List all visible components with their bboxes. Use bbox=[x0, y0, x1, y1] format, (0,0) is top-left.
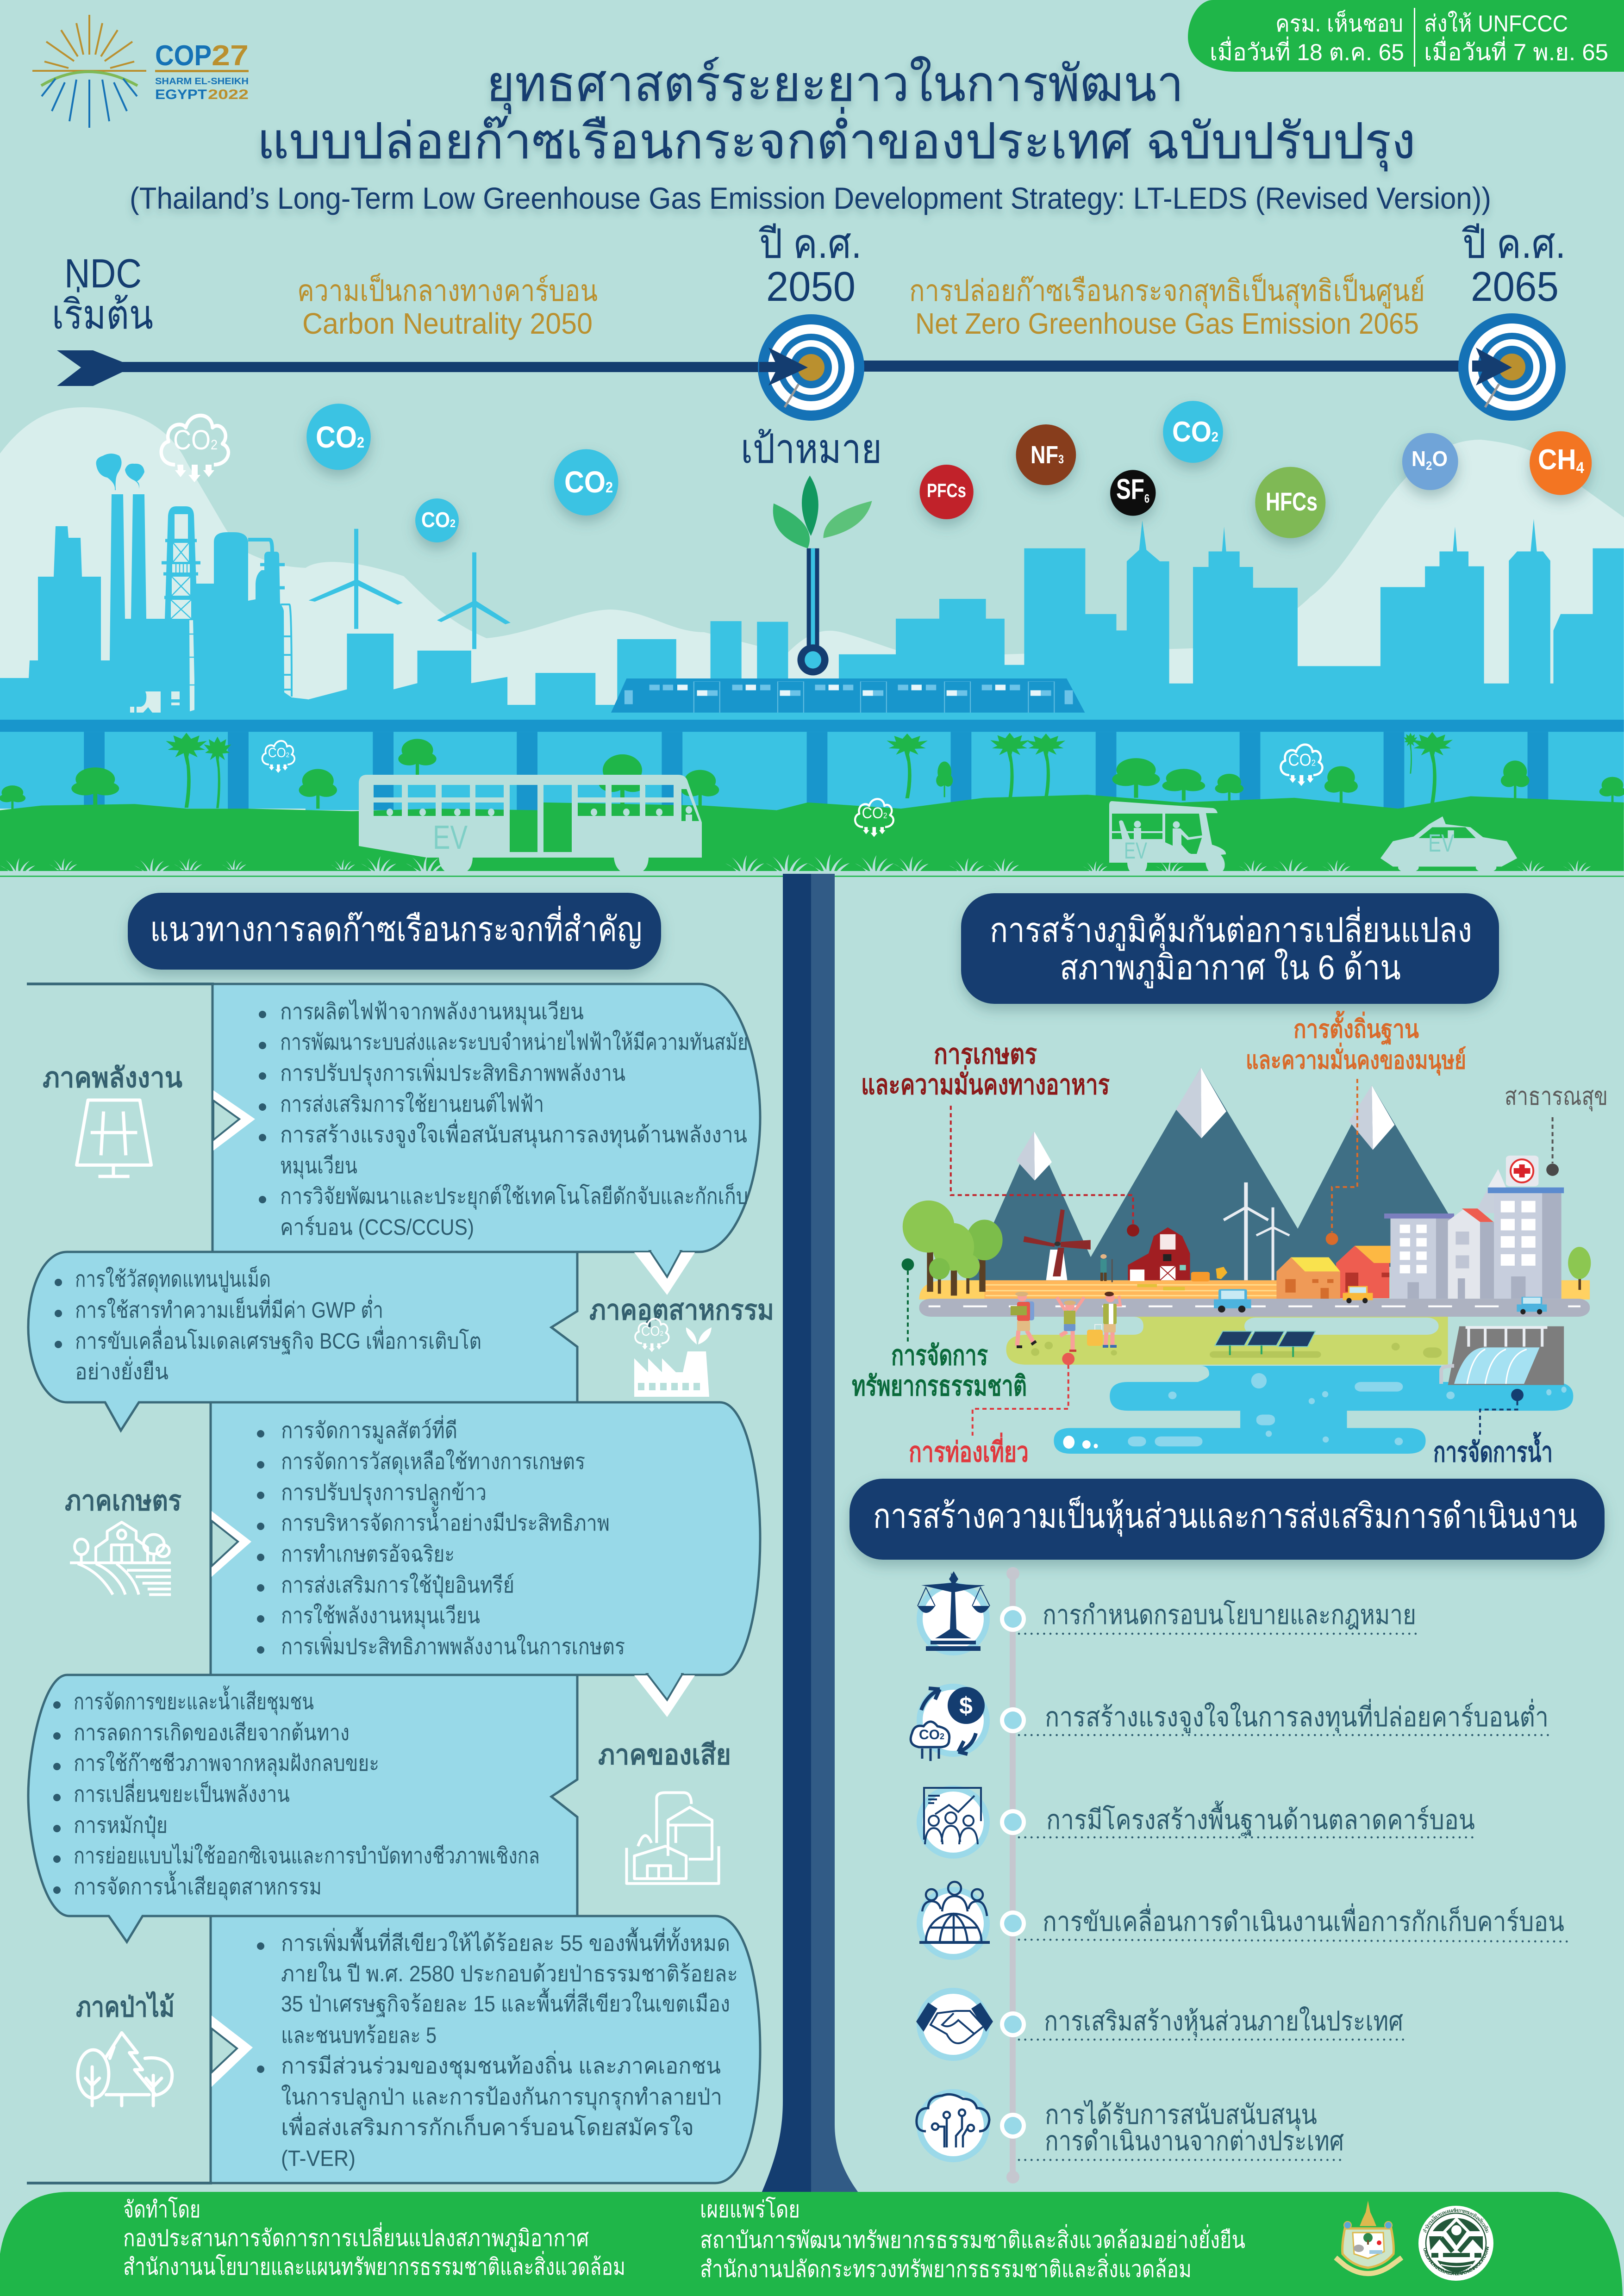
EV tuk tuk: EV bbox=[1124, 838, 1147, 864]
logo: ONEP: สำนักงานนโยบายและแผนทรัพยากรธรรมชาติและสิ่งแวดล้อม bbox=[1422, 2208, 1490, 2234]
panel: industry: อย่างยั่งยืน bbox=[75, 1356, 169, 1384]
heading: mitigation: แนวทางการลดก๊าซเรือนกระจกที่สำคัญ bbox=[150, 905, 642, 949]
gas labels: HFCs bbox=[1266, 487, 1318, 516]
panel: energy: การผลิตไฟฟ้าจากพลังงานหมุนเวียน bbox=[280, 999, 584, 1025]
carbon neutrality label: Carbon Neutrality 2050 bbox=[302, 307, 593, 340]
icon: plant thermometer bbox=[773, 475, 872, 675]
label: agriculture and food security: การเกษตร bbox=[934, 1039, 1037, 1070]
icon: solar panel bbox=[77, 1100, 151, 1176]
icon: factory: CO2 bbox=[641, 1324, 663, 1339]
footer bbox=[0, 2192, 1623, 2296]
title: (Thailand’s Long-Term Low Greenhouse Gas Emission Development Strategy: LT-LEDS (Revised Version)) bbox=[130, 181, 1491, 215]
panel: agriculture: การจัดการวัสดุเหลือใช้ทางการเกษตร bbox=[281, 1449, 585, 1475]
net zero label bbox=[909, 274, 1425, 340]
panel: waste: การลดการเกิดของเสียจากต้นทาง bbox=[74, 1721, 350, 1745]
gas labels: PFCs bbox=[927, 479, 966, 501]
panel: waste: การจัดการน้ำเสียอุตสาหกรรม bbox=[74, 1871, 322, 1900]
panel: forestry: (T-VER) bbox=[281, 2147, 356, 2171]
co2 bubbles bbox=[306, 401, 1592, 542]
COP27 logo: EGYPT bbox=[155, 87, 207, 102]
tourists bbox=[1011, 1292, 1120, 1352]
COP27 logo: SHARM EL-SHEIKH bbox=[155, 76, 249, 87]
panel: energy bbox=[27, 983, 760, 1295]
panel: forestry: ในการปลูกป่า และการป้องกันการบุกรุกทำลายป่า bbox=[281, 2084, 722, 2110]
label: water management: การจัดการน้ำ bbox=[1433, 1431, 1553, 1468]
panel: forestry: และชนบทร้อยละ 5 bbox=[281, 2023, 437, 2048]
gas labels: CO2 bbox=[564, 465, 613, 499]
panel: industry: การใช้วัสดุทดแทนปูนเม็ด bbox=[75, 1266, 271, 1293]
panel: forestry bbox=[27, 1916, 760, 2184]
co2 clouds on landscape: CO2 bbox=[1288, 750, 1316, 769]
city skyline bbox=[306, 519, 1624, 810]
title: แบบปล่อยก๊าซเรือนกระจกต่ำของประเทศ ฉบับปรับปรุง bbox=[257, 107, 1416, 172]
date badge: เมื่อวันที่ 18 ต.ค. 65 bbox=[1210, 37, 1404, 65]
panel: waste: การเปลี่ยนขยะเป็นพลังงาน bbox=[74, 1779, 290, 1807]
COP27 logo: COP bbox=[155, 40, 212, 72]
icon: trees bbox=[78, 2033, 172, 2106]
partnership list text bbox=[1019, 1599, 1569, 2160]
panel: agriculture bbox=[65, 1402, 760, 1717]
grass blades bbox=[0, 854, 1624, 876]
panel: waste bbox=[28, 1675, 731, 1942]
panel: forestry: การมีส่วนร่วมของชุมชนท้องถิ่น และภาคเอกชน bbox=[281, 2050, 721, 2079]
carbon neutrality label: ความเป็นกลางทางคาร์บอน bbox=[297, 274, 598, 307]
EV bus: EV bbox=[433, 819, 468, 856]
partnership list text: การเสริมสร้างหุ้นส่วนภายในประเทศ bbox=[1044, 2006, 1403, 2038]
gas labels: 4 bbox=[1576, 459, 1584, 477]
label: natural resources: ทรัพยากรธรรมชาติ bbox=[852, 1370, 1027, 1401]
item: low-carbon investment: CO2 bbox=[919, 1727, 944, 1742]
footer: สำนักงานปลัดกระทรวงทรัพยากรธรรมชาติและสิ่งแวดล้อม bbox=[700, 2253, 1192, 2282]
timeline arrow shafts bbox=[57, 350, 1481, 386]
panel: waste: ภาคของเสีย bbox=[598, 1739, 731, 1770]
panel: energy: การพัฒนาระบบส่งและระบบจำหน่ายไฟฟ้าให้มีความทันสมัย bbox=[280, 1029, 748, 1055]
panel: energy: หมุนเวียน bbox=[280, 1154, 357, 1179]
COP27 logo bbox=[32, 15, 249, 128]
panel: waste: การจัดการขยะและน้ำเสียชุมชน bbox=[74, 1686, 314, 1715]
item: carbon market bbox=[917, 1786, 990, 1859]
EV car bbox=[1380, 816, 1517, 872]
gas labels: CO2 bbox=[421, 508, 456, 532]
panel: agriculture: ภาคเกษตร bbox=[65, 1485, 181, 1516]
panel: energy: การวิจัยพัฒนาและประยุกต์ใช้เทคโนโลยีดักจับและกักเก็บ bbox=[280, 1183, 748, 1210]
panel: energy: การสร้างแรงจูงใจเพื่อสนับสนุนการลงทุนด้านพลังงาน bbox=[280, 1119, 747, 1148]
elevated track and pillars bbox=[0, 713, 1624, 810]
panel: agriculture: การปรับปรุงการปลูกข้าว bbox=[281, 1481, 487, 1506]
panel: energy: การปรับปรุงการเพิ่มประสิทธิภาพพลังงาน bbox=[280, 1058, 625, 1087]
logo: ministry seal bbox=[1336, 2201, 1402, 2273]
heading: adaptation: สภาพภูมิอากาศ ใน 6 ด้าน bbox=[1060, 948, 1401, 989]
panel: forestry: ภายใน ปี พ.ศ. 2580 ประกอบด้วยป่าธรรมชาติร้อยละ bbox=[281, 1961, 738, 1986]
panel: waste: การหมักปุ๋ย bbox=[74, 1813, 168, 1839]
panel: agriculture: การใช้พลังงานหมุนเวียน bbox=[281, 1603, 480, 1629]
label: agriculture and food security: และความมั่นคงทางอาหาร bbox=[861, 1065, 1110, 1100]
gas labels: CO2 bbox=[1172, 416, 1218, 448]
gas labels: 2 bbox=[1426, 459, 1432, 473]
item: policy and law bbox=[917, 1571, 990, 1655]
partnership list text: การกำหนดกรอบนโยบายและกฎหมาย bbox=[1043, 1599, 1416, 1630]
net zero label: Net Zero Greenhouse Gas Emission 2065 bbox=[915, 307, 1419, 340]
gas labels: SF bbox=[1116, 473, 1153, 505]
co2 clouds on landscape: CO2 bbox=[173, 424, 218, 455]
gas labels: N bbox=[1412, 447, 1427, 471]
date badge: ส่งให้ UNFCCC bbox=[1424, 11, 1568, 37]
item: international support bbox=[917, 2089, 990, 2162]
gas labels: CO2 bbox=[316, 420, 364, 454]
gas labels: CH bbox=[1538, 444, 1580, 476]
heading: adaptation bbox=[961, 893, 1499, 1004]
partnership list text: การขับเคลื่อนการดำเนินงานเพื่อการกักเก็บคาร์บอน bbox=[1043, 1903, 1564, 1937]
panel: forestry: การเพิ่มพื้นที่สีเขียวให้ได้ร้อยละ 55 ของพื้นที่ทั้งหมด bbox=[281, 1927, 730, 1956]
target 2050 bbox=[758, 314, 864, 421]
partnership list text: การได้รับการสนับสนับสนุน bbox=[1045, 2099, 1317, 2131]
partnership timeline line bbox=[1006, 1567, 1019, 2184]
gas labels bbox=[316, 416, 1584, 532]
list markers bbox=[1000, 1606, 1026, 2139]
partnership list text: การดำเนินงานจากต่างประเทศ bbox=[1045, 2126, 1344, 2156]
icon: waste plant bbox=[627, 1792, 719, 1884]
panel: energy: การส่งเสริมการใช้ยานยนต์ไฟฟ้า bbox=[280, 1091, 544, 1117]
panel: forestry: เพื่อส่งเสริมการกักเก็บคาร์บอนโดยสมัครใจ bbox=[281, 2112, 694, 2140]
footer: สถาบันการพัฒนาทรัพยากรธรรมชาติและสิ่งแวดล้อมอย่างยั่งยืน bbox=[700, 2224, 1245, 2253]
panel: agriculture: การเพิ่มประสิทธิภาพพลังงานในการเกษตร bbox=[281, 1631, 625, 1659]
item: domestic partnerships bbox=[916, 1988, 993, 2061]
timeline labels: 2050 bbox=[766, 264, 856, 310]
gas labels: NF3 bbox=[1031, 441, 1064, 469]
EV car: EV bbox=[1428, 829, 1454, 857]
title bbox=[130, 56, 1491, 215]
partnership list text: การมีโครงสร้างพื้นฐานด้านตลาดคาร์บอน bbox=[1046, 1801, 1475, 1836]
item: low-carbon investment: $ bbox=[959, 1692, 973, 1719]
icon: farm bbox=[70, 1522, 171, 1594]
label: human settlement: และความมั่นคงของมนุษย์ bbox=[1246, 1042, 1466, 1076]
title: ยุทธศาสตร์ระยะยาวในการพัฒนา bbox=[487, 56, 1184, 114]
footer: กองประสานการจัดการการเปลี่ยนแปลงสภาพภูมิอากาศ bbox=[123, 2222, 589, 2252]
central column bbox=[760, 874, 861, 2196]
panel: industry: การใช้สารทำความเย็นที่มีค่า GWP ต่ำ bbox=[75, 1294, 383, 1323]
panel: industry bbox=[28, 1252, 774, 1431]
gas labels: O bbox=[1432, 447, 1448, 471]
footer: เผยแพร่โดย bbox=[700, 2196, 800, 2222]
timeline labels: ปี ค.ศ. bbox=[1462, 221, 1566, 267]
co2 clouds on landscape: CO2 bbox=[862, 804, 887, 822]
illustration: climate resilience landscape bbox=[902, 1067, 1591, 1454]
label: human settlement: การตั้งถิ่นฐาน bbox=[1293, 1011, 1419, 1045]
date badge: เมื่อวันที่ 7 พ.ย. 65 bbox=[1424, 37, 1608, 65]
panel: agriculture: การส่งเสริมการใช้ปุ๋ยอินทรีย์ bbox=[281, 1572, 514, 1599]
item: carbon capture bbox=[917, 1882, 990, 1960]
footer: จัดทำโดย bbox=[123, 2196, 200, 2222]
timeline labels bbox=[52, 221, 1566, 472]
date badge bbox=[1188, 0, 1624, 72]
panel: agriculture: การทำเกษตรอัจฉริยะ bbox=[281, 1542, 455, 1567]
label: human settlement bbox=[1246, 1011, 1466, 1076]
panel: waste: การใช้ก๊าซชีวภาพจากหลุมฝังกลบขยะ bbox=[74, 1750, 379, 1777]
ground and trees bbox=[0, 732, 1624, 877]
panel: agriculture: การบริหารจัดการน้ำอย่างมีประสิทธิภาพ bbox=[281, 1507, 610, 1536]
co2 clouds on landscape bbox=[161, 416, 1322, 837]
partnership list text: การสร้างแรงจูงใจในการลงทุนที่ปล่อยคาร์บอนต่ำ bbox=[1045, 1699, 1549, 1734]
heading: adaptation: การสร้างภูมิคุ้มกันต่อการเปลี่ยนแปลง bbox=[990, 906, 1472, 951]
target 2065 bbox=[1458, 313, 1566, 421]
co2 clouds on landscape: CO2 bbox=[268, 746, 289, 760]
EV tuk tuk bbox=[1109, 801, 1226, 874]
heading: partnership bbox=[849, 1479, 1605, 1560]
COP27 logo: 2022 bbox=[208, 87, 249, 102]
timeline labels: เป้าหมาย bbox=[741, 426, 882, 472]
icon: factory bbox=[634, 1319, 712, 1397]
industrial plant silhouette bbox=[0, 454, 308, 722]
panel: energy: ภาคพลังงาน bbox=[43, 1062, 182, 1093]
panel: waste: การย่อยแบบไม่ใช้ออกซิเจนและการบำบัดทางชีวภาพเชิงกล bbox=[74, 1843, 540, 1868]
panel: forestry: ภาคป่าไม้ bbox=[76, 1991, 175, 2022]
footer: สำนักงานนโยบายและแผนทรัพยากรธรรมชาติและสิ่งแวดล้อม bbox=[123, 2251, 625, 2280]
timeline labels: NDC bbox=[64, 250, 142, 296]
item: low-carbon investment bbox=[911, 1684, 990, 1761]
timeline labels: เริ่มต้น bbox=[52, 286, 153, 337]
gas labels: 6 bbox=[1144, 492, 1149, 505]
label: agriculture and food security bbox=[861, 1039, 1110, 1100]
net zero label: การปล่อยก๊าซเรือนกระจกสุทธิเป็นสุทธิเป็นศูนย์ bbox=[909, 274, 1425, 309]
logo: ONEP: OFFICE OF NATURAL RESOURCES AND ENVIRONMENTAL POLICY AND PLANNING bbox=[0, 0, 1490, 2277]
train bbox=[609, 678, 1087, 717]
timeline labels: ปี ค.ศ. bbox=[758, 221, 862, 267]
carbon neutrality label bbox=[297, 274, 598, 340]
panel: agriculture: การจัดการมูลสัตว์ที่ดี bbox=[281, 1415, 457, 1444]
date badge: ครม. เห็นชอบ bbox=[1275, 10, 1403, 37]
timeline labels: 2065 bbox=[1471, 264, 1559, 310]
panel: industry: การขับเคลื่อนโมเดลเศรษฐกิจ BCG เพื่อการเติบโต bbox=[75, 1325, 481, 1354]
heading: mitigation bbox=[128, 893, 661, 970]
panel: industry: ภาคอุตสาหกรรม bbox=[589, 1294, 774, 1327]
EV bus bbox=[359, 775, 702, 874]
panel: energy: คาร์บอน (CCS/CCUS) bbox=[280, 1215, 474, 1240]
landscape background hills bbox=[0, 407, 1624, 833]
label: natural resources: การจัดการ bbox=[891, 1340, 988, 1371]
label: tourism: การท่องเที่ยว bbox=[909, 1432, 1029, 1468]
label: natural resources bbox=[852, 1340, 1027, 1401]
panel: forestry: 35 ป่าเศรษฐกิจร้อยละ 15 และพื้นที่สีเขียวในเขตเมือง bbox=[281, 1988, 730, 2017]
COP27 logo: 27 bbox=[212, 40, 249, 72]
